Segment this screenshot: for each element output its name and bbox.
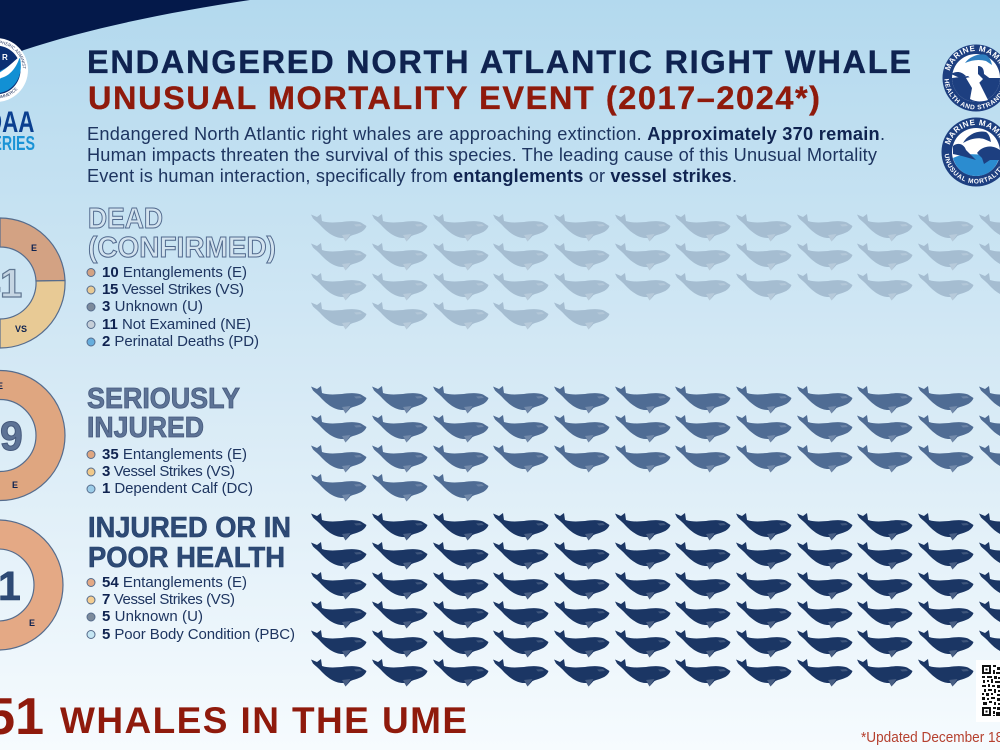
intro text	[87, 124, 885, 186]
legend: seriously injured: 3 Vessel Strikes (VS)	[102, 463, 235, 480]
header swoosh	[0, 0, 250, 60]
heading: seriously injured: SERIOUSLY	[87, 383, 240, 415]
logo: NOAA Fisheries: R	[2, 53, 8, 62]
legend: injured or in poor health: 7 Vessel Strikes (VS)	[102, 591, 235, 608]
title: ENDANGERED NORTH ATLANTIC RIGHT WHALE	[87, 44, 911, 80]
donut: seriously injured	[0, 370, 65, 500]
legend: dead: 15 Vessel Strikes (VS)	[102, 281, 244, 298]
heading: dead	[88, 203, 276, 264]
whales: injured or in poor health	[311, 513, 1000, 686]
heading: dead: DEAD	[88, 203, 163, 235]
legend: dead	[87, 264, 259, 350]
heading: injured or in poor health: POOR HEALTH	[88, 542, 285, 574]
intro text: Human impacts threaten the survival of this species. The leading cause of this Unusual Mortality	[87, 145, 878, 165]
title	[87, 44, 911, 116]
QR code	[976, 660, 1000, 722]
intro text: Endangered North Atlantic right whales are approaching extinction. Approximately 370 remain.	[87, 124, 885, 144]
donut: injured or in poor health: E	[29, 618, 35, 628]
heading: seriously injured: INJURED	[87, 412, 204, 444]
legend: injured or in poor health: 5 Unknown (U)	[102, 608, 203, 625]
legend: injured or in poor health: 5 Poor Body Condition (PBC)	[102, 626, 295, 643]
total: whales in the UME: WHALES IN THE UME	[60, 700, 467, 741]
heading: dead: (CONFIRMED)	[88, 232, 276, 264]
legend: dead: 3 Unknown (U)	[102, 298, 203, 315]
legend: seriously injured: 1 Dependent Calf (DC)	[102, 480, 253, 497]
legend: dead: 11 Not Examined (NE)	[102, 316, 251, 333]
total: whales in the UME	[0, 688, 467, 746]
legend: seriously injured: 35 Entanglements (E)	[102, 446, 247, 463]
donut: seriously injured: E	[12, 480, 18, 490]
heading: seriously injured	[87, 383, 240, 444]
title: UNUSUAL MORTALITY EVENT (2017–2024*)	[88, 80, 820, 116]
donut: injured or in poor health	[0, 520, 63, 650]
donut: dead: E	[31, 243, 37, 253]
heading: injured or in poor health	[88, 512, 291, 574]
logo: marine mammal unusual mortality	[942, 118, 1000, 186]
whales: dead	[311, 214, 1000, 330]
legend: dead: 2 Perinatal Deaths (PD)	[102, 333, 259, 350]
intro text: Event is human interaction, specifically from entanglements or vessel strikes.	[87, 166, 737, 186]
donut: dead	[0, 218, 65, 348]
donut: dead: VS	[15, 324, 27, 334]
legend: seriously injured	[87, 446, 253, 497]
logo: marine mammal health and stranding	[942, 44, 1000, 112]
whales: seriously injured	[311, 386, 1000, 502]
legend: injured or in poor health	[87, 574, 295, 643]
heading: injured or in poor health: INJURED OR IN	[88, 512, 291, 544]
legend: dead: 10 Entanglements (E)	[102, 264, 247, 281]
logo: NOAA Fisheries	[0, 38, 35, 155]
legend: injured or in poor health: 54 Entanglements (E)	[102, 574, 247, 591]
